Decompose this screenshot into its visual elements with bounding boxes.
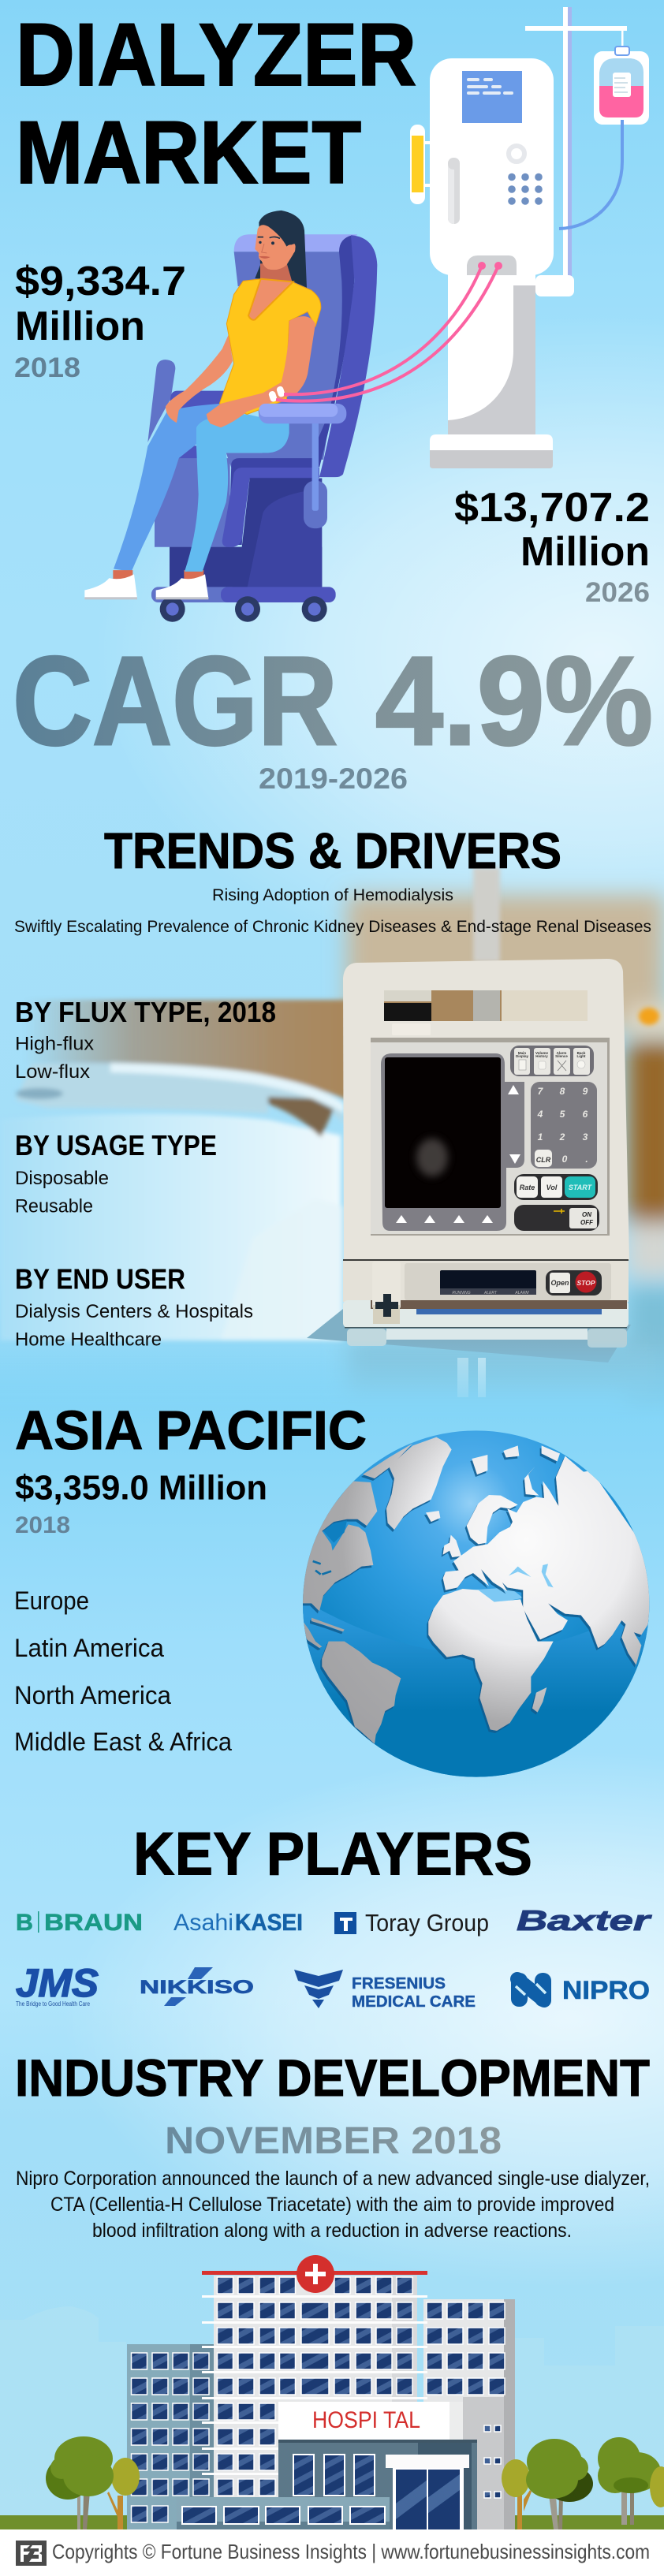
IV pole bbox=[525, 7, 627, 283]
entrance block bbox=[278, 2440, 477, 2529]
illustration: patient in chair bbox=[84, 211, 377, 622]
logo: Nikkiso: NIKKISO bbox=[140, 1977, 254, 1998]
list: other regions: North America bbox=[14, 1681, 171, 1709]
logo: Toray Group: Toray Group bbox=[365, 1909, 489, 1937]
stat: 2018 market value: Million bbox=[15, 304, 145, 349]
soft key triangles bbox=[396, 1085, 520, 1223]
function buttons: Volume bbox=[535, 1051, 548, 1055]
hair bbox=[255, 211, 307, 288]
Eurasia bbox=[443, 1456, 652, 1648]
numeric keypad: 4 bbox=[537, 1109, 543, 1120]
roof bar bbox=[202, 2271, 427, 2275]
trees left bbox=[46, 2436, 140, 2529]
main tower bbox=[202, 2276, 427, 2529]
stat: 2018 market value bbox=[14, 259, 186, 383]
numeric keypad: CLR bbox=[536, 1156, 551, 1164]
logo: B Braun: B bbox=[16, 1910, 33, 1936]
stat: 2026 market value: 2026 bbox=[585, 577, 650, 608]
segment: flux type bbox=[15, 996, 276, 1083]
background: photo fade into regional section bbox=[0, 1340, 664, 1419]
function buttons: Main bbox=[518, 1051, 526, 1055]
yellow handle bbox=[410, 125, 431, 204]
neck bbox=[260, 263, 293, 282]
numeric keypad: 8 bbox=[560, 1086, 565, 1097]
heading: Asia Pacific: $3,359.0 Million bbox=[15, 1468, 267, 1508]
Southeast Asia bbox=[621, 1620, 641, 1665]
background: light glow behind logos bbox=[63, 1750, 664, 2287]
segment: usage type: Disposable bbox=[15, 1168, 109, 1189]
Iceland bbox=[426, 1511, 440, 1522]
list: other regions: Latin America bbox=[14, 1634, 164, 1662]
power switch: OFF bbox=[580, 1219, 594, 1226]
chair wheels bbox=[160, 596, 327, 622]
Scandinavia bbox=[467, 1495, 518, 1544]
logo: Asahi Kasei bbox=[173, 1910, 303, 1936]
hospital sign: HOSPI TAL bbox=[312, 2407, 420, 2433]
heading: key players: KEY PLAYERS bbox=[133, 1820, 532, 1888]
pump lower unit: RUNNING bbox=[452, 1291, 471, 1295]
face panel bbox=[371, 1038, 610, 1236]
hospital sign bbox=[278, 2402, 463, 2440]
heading: Asia Pacific: ASIA PACIFIC bbox=[15, 1400, 367, 1461]
chair base bar bbox=[151, 587, 336, 602]
Black Sea bbox=[509, 1567, 531, 1577]
Caspian Sea bbox=[542, 1564, 554, 1587]
list: other regions: Europe bbox=[14, 1586, 89, 1615]
Franz Josef Land bbox=[503, 1445, 519, 1457]
Cuba bbox=[311, 1618, 345, 1631]
icon: Fortune Business Insights logo bbox=[16, 2541, 47, 2566]
armrest support bbox=[304, 423, 327, 528]
front arm bbox=[207, 316, 315, 427]
rate volume start buttons: Rate bbox=[520, 1184, 535, 1191]
CAGR period: 2019-2026 bbox=[259, 762, 408, 795]
illustration: dialysis machine bbox=[410, 7, 649, 468]
machine base bbox=[430, 434, 553, 468]
heading: Asia Pacific bbox=[15, 1400, 367, 1538]
tube port bbox=[467, 255, 517, 275]
logo: Nipro: NIPRO bbox=[562, 1976, 650, 2004]
stat: 2018 market value: $9,334.7 bbox=[15, 259, 186, 304]
keypad dots bbox=[508, 173, 543, 205]
machine screen bbox=[462, 71, 522, 123]
segment: flux type: High-flux bbox=[15, 1033, 94, 1055]
glass shelf reflection bbox=[307, 1309, 631, 1397]
pump lower unit bbox=[343, 1259, 629, 1302]
icon: red cross badge bbox=[297, 2255, 334, 2293]
blue IV tube bbox=[559, 120, 622, 229]
armrest bbox=[259, 404, 346, 423]
Novaya Zemlya bbox=[524, 1467, 539, 1496]
segment: usage type: Reusable bbox=[15, 1195, 93, 1217]
segment: flux type: Low-flux bbox=[15, 1061, 90, 1083]
logo: B Braun bbox=[16, 1910, 143, 1936]
entrance door bbox=[386, 2455, 469, 2529]
cassette latch bbox=[372, 1262, 401, 1324]
function buttons bbox=[510, 1046, 594, 1076]
low front wing bbox=[177, 2497, 390, 2529]
power switch bbox=[514, 1205, 599, 1231]
segment: end user: Dialysis Centers & Hospitals bbox=[15, 1301, 253, 1322]
pump base bbox=[343, 1300, 629, 1348]
numeric keypad: 1 bbox=[538, 1131, 543, 1143]
chair lower body bbox=[155, 445, 322, 588]
South America bbox=[322, 1642, 401, 1744]
paragraph: development description: blood infiltration along with a reduction in adverse reactions. bbox=[92, 2220, 572, 2242]
logo: Fresenius Medical Care: MEDICAL CARE bbox=[352, 1993, 476, 2011]
CAGR headline: 4.9% bbox=[375, 630, 653, 771]
logo: B Braun: BRAUN bbox=[44, 1910, 143, 1936]
Greenland bbox=[386, 1437, 452, 1530]
logo: Asahi Kasei: KASEI bbox=[235, 1910, 303, 1936]
Spitsbergen bbox=[472, 1455, 487, 1474]
pump lower unit: Open bbox=[550, 1279, 569, 1287]
bandages bbox=[268, 386, 285, 403]
segment: end user bbox=[15, 1263, 253, 1351]
background: blurred hospital photo bbox=[0, 867, 664, 1419]
logo: Fresenius Medical Care: FRESENIUS bbox=[352, 1975, 446, 1993]
screen surround bbox=[381, 1053, 524, 1231]
logo: Fresenius Medical Care bbox=[294, 1970, 476, 2011]
paragraph: development description: CTA (Cellentia-H Cellulose Triacetate) with the aim to provide improved bbox=[50, 2194, 614, 2216]
chair side panel bbox=[147, 360, 175, 442]
icon: IV bag bbox=[594, 47, 649, 125]
numeric keypad: 5 bbox=[560, 1109, 565, 1120]
numeric keypad: 3 bbox=[583, 1131, 588, 1143]
front leg bbox=[185, 414, 289, 572]
icon: globe bbox=[300, 1430, 655, 1782]
back leg bbox=[114, 404, 221, 572]
background skyline bbox=[0, 2306, 664, 2517]
text: driver two: Swiftly Escalating Prevalence of Chronic Kidney Diseases & End-stage Renal Diseases bbox=[14, 918, 651, 936]
rate volume start buttons bbox=[514, 1174, 598, 1200]
segment: usage type bbox=[15, 1129, 217, 1217]
battery door tab bbox=[392, 1023, 431, 1035]
side slot bbox=[448, 158, 460, 224]
handle opening bbox=[384, 990, 588, 1021]
function buttons: Light bbox=[577, 1054, 586, 1058]
pump lower unit: ALARM bbox=[514, 1291, 529, 1295]
stat: 2018 market value: 2018 bbox=[14, 352, 80, 383]
Great Lakes bbox=[313, 1561, 331, 1575]
numeric keypad bbox=[531, 1082, 597, 1169]
right wing bbox=[423, 2299, 515, 2529]
background: light glow behind CAGR bbox=[95, 315, 664, 993]
chest neckline bbox=[248, 279, 293, 320]
footer bar bbox=[0, 2529, 664, 2576]
machine column bbox=[448, 268, 574, 434]
Canadian Arctic bbox=[363, 1444, 412, 1478]
shoes bbox=[84, 570, 208, 599]
text: driver one: Rising Adoption of Hemodialysis bbox=[212, 886, 453, 904]
ground bbox=[0, 2515, 664, 2529]
shirt bbox=[219, 279, 321, 414]
Africa bbox=[428, 1589, 554, 1731]
logo: Nipro bbox=[511, 1973, 650, 2007]
CAGR headline: CAGR bbox=[13, 630, 338, 771]
stat: 2026 market value: $13,707.2 bbox=[454, 485, 650, 531]
photo: infusion pump device bbox=[307, 959, 631, 1397]
segment: flux type: BY FLUX TYPE, 2018 bbox=[15, 996, 276, 1028]
function buttons: Alarm bbox=[557, 1051, 566, 1055]
LCD screen bbox=[385, 1057, 501, 1208]
chair back bbox=[234, 234, 377, 477]
North America bbox=[301, 1481, 377, 1611]
numeric keypad: 0 bbox=[562, 1154, 568, 1165]
back arm bbox=[166, 334, 233, 423]
power switch: ON bbox=[582, 1211, 591, 1218]
function buttons: Silence bbox=[555, 1054, 568, 1058]
face bbox=[255, 225, 296, 270]
windows bbox=[131, 2277, 505, 2522]
trees right bbox=[502, 2437, 664, 2529]
title bbox=[16, 6, 416, 202]
function buttons: Back bbox=[577, 1051, 586, 1055]
illustration: hospital building bbox=[127, 2255, 515, 2529]
numeric keypad: 6 bbox=[583, 1109, 588, 1120]
function buttons: History bbox=[535, 1054, 548, 1058]
heading: Asia Pacific: 2018 bbox=[15, 1512, 70, 1538]
segment: end user: BY END USER bbox=[15, 1263, 185, 1295]
machine body bbox=[430, 58, 554, 275]
pump casing bbox=[343, 959, 629, 1260]
list: other regions: Middle East & Africa bbox=[14, 1728, 232, 1756]
title: MARKET bbox=[16, 103, 361, 202]
logo: JMS: The Bridge to Good Health Care bbox=[16, 2000, 90, 2007]
numeric keypad: 2 bbox=[559, 1131, 565, 1143]
pump lower unit: ALERT bbox=[483, 1291, 498, 1295]
numeric keypad: 9 bbox=[583, 1086, 588, 1097]
left wing bbox=[127, 2344, 214, 2529]
rate volume start buttons: Vol bbox=[546, 1184, 558, 1191]
numeric keypad: . bbox=[585, 1154, 588, 1165]
paragraph: development description bbox=[16, 2168, 650, 2242]
logo: Baxter: Baxter bbox=[517, 1904, 652, 1937]
control knob bbox=[509, 146, 524, 162]
segment: end user: Home Healthcare bbox=[15, 1329, 162, 1351]
pink blood tubes bbox=[276, 266, 498, 401]
list: other regions bbox=[14, 1586, 232, 1756]
chair seat back bbox=[168, 391, 226, 410]
heading: trends and drivers: TRENDS & DRIVERS bbox=[104, 822, 561, 879]
stat: 2026 market value bbox=[454, 485, 650, 608]
segment: usage type: BY USAGE TYPE bbox=[15, 1129, 217, 1161]
Madagascar bbox=[532, 1687, 546, 1713]
logo: Asahi Kasei: Asahi bbox=[173, 1910, 233, 1936]
Severnaya Zemlya bbox=[542, 1445, 560, 1461]
British Isles bbox=[443, 1535, 461, 1557]
CAGR headline bbox=[13, 630, 653, 771]
Hudson Bay bbox=[323, 1520, 347, 1543]
logo: Nikkiso bbox=[140, 1967, 254, 2006]
numeric keypad: 7 bbox=[538, 1086, 544, 1097]
Central America bbox=[302, 1620, 322, 1648]
logo: JMS: JMS bbox=[16, 1961, 99, 2005]
rate volume start buttons: START bbox=[569, 1184, 593, 1191]
date: NOVEMBER 2018 bbox=[165, 2120, 502, 2162]
function buttons: Display bbox=[516, 1054, 528, 1058]
pump lower unit: STOP bbox=[577, 1279, 595, 1287]
stat: 2026 market value: Million bbox=[520, 529, 650, 575]
title: DIALYZER bbox=[16, 6, 416, 104]
